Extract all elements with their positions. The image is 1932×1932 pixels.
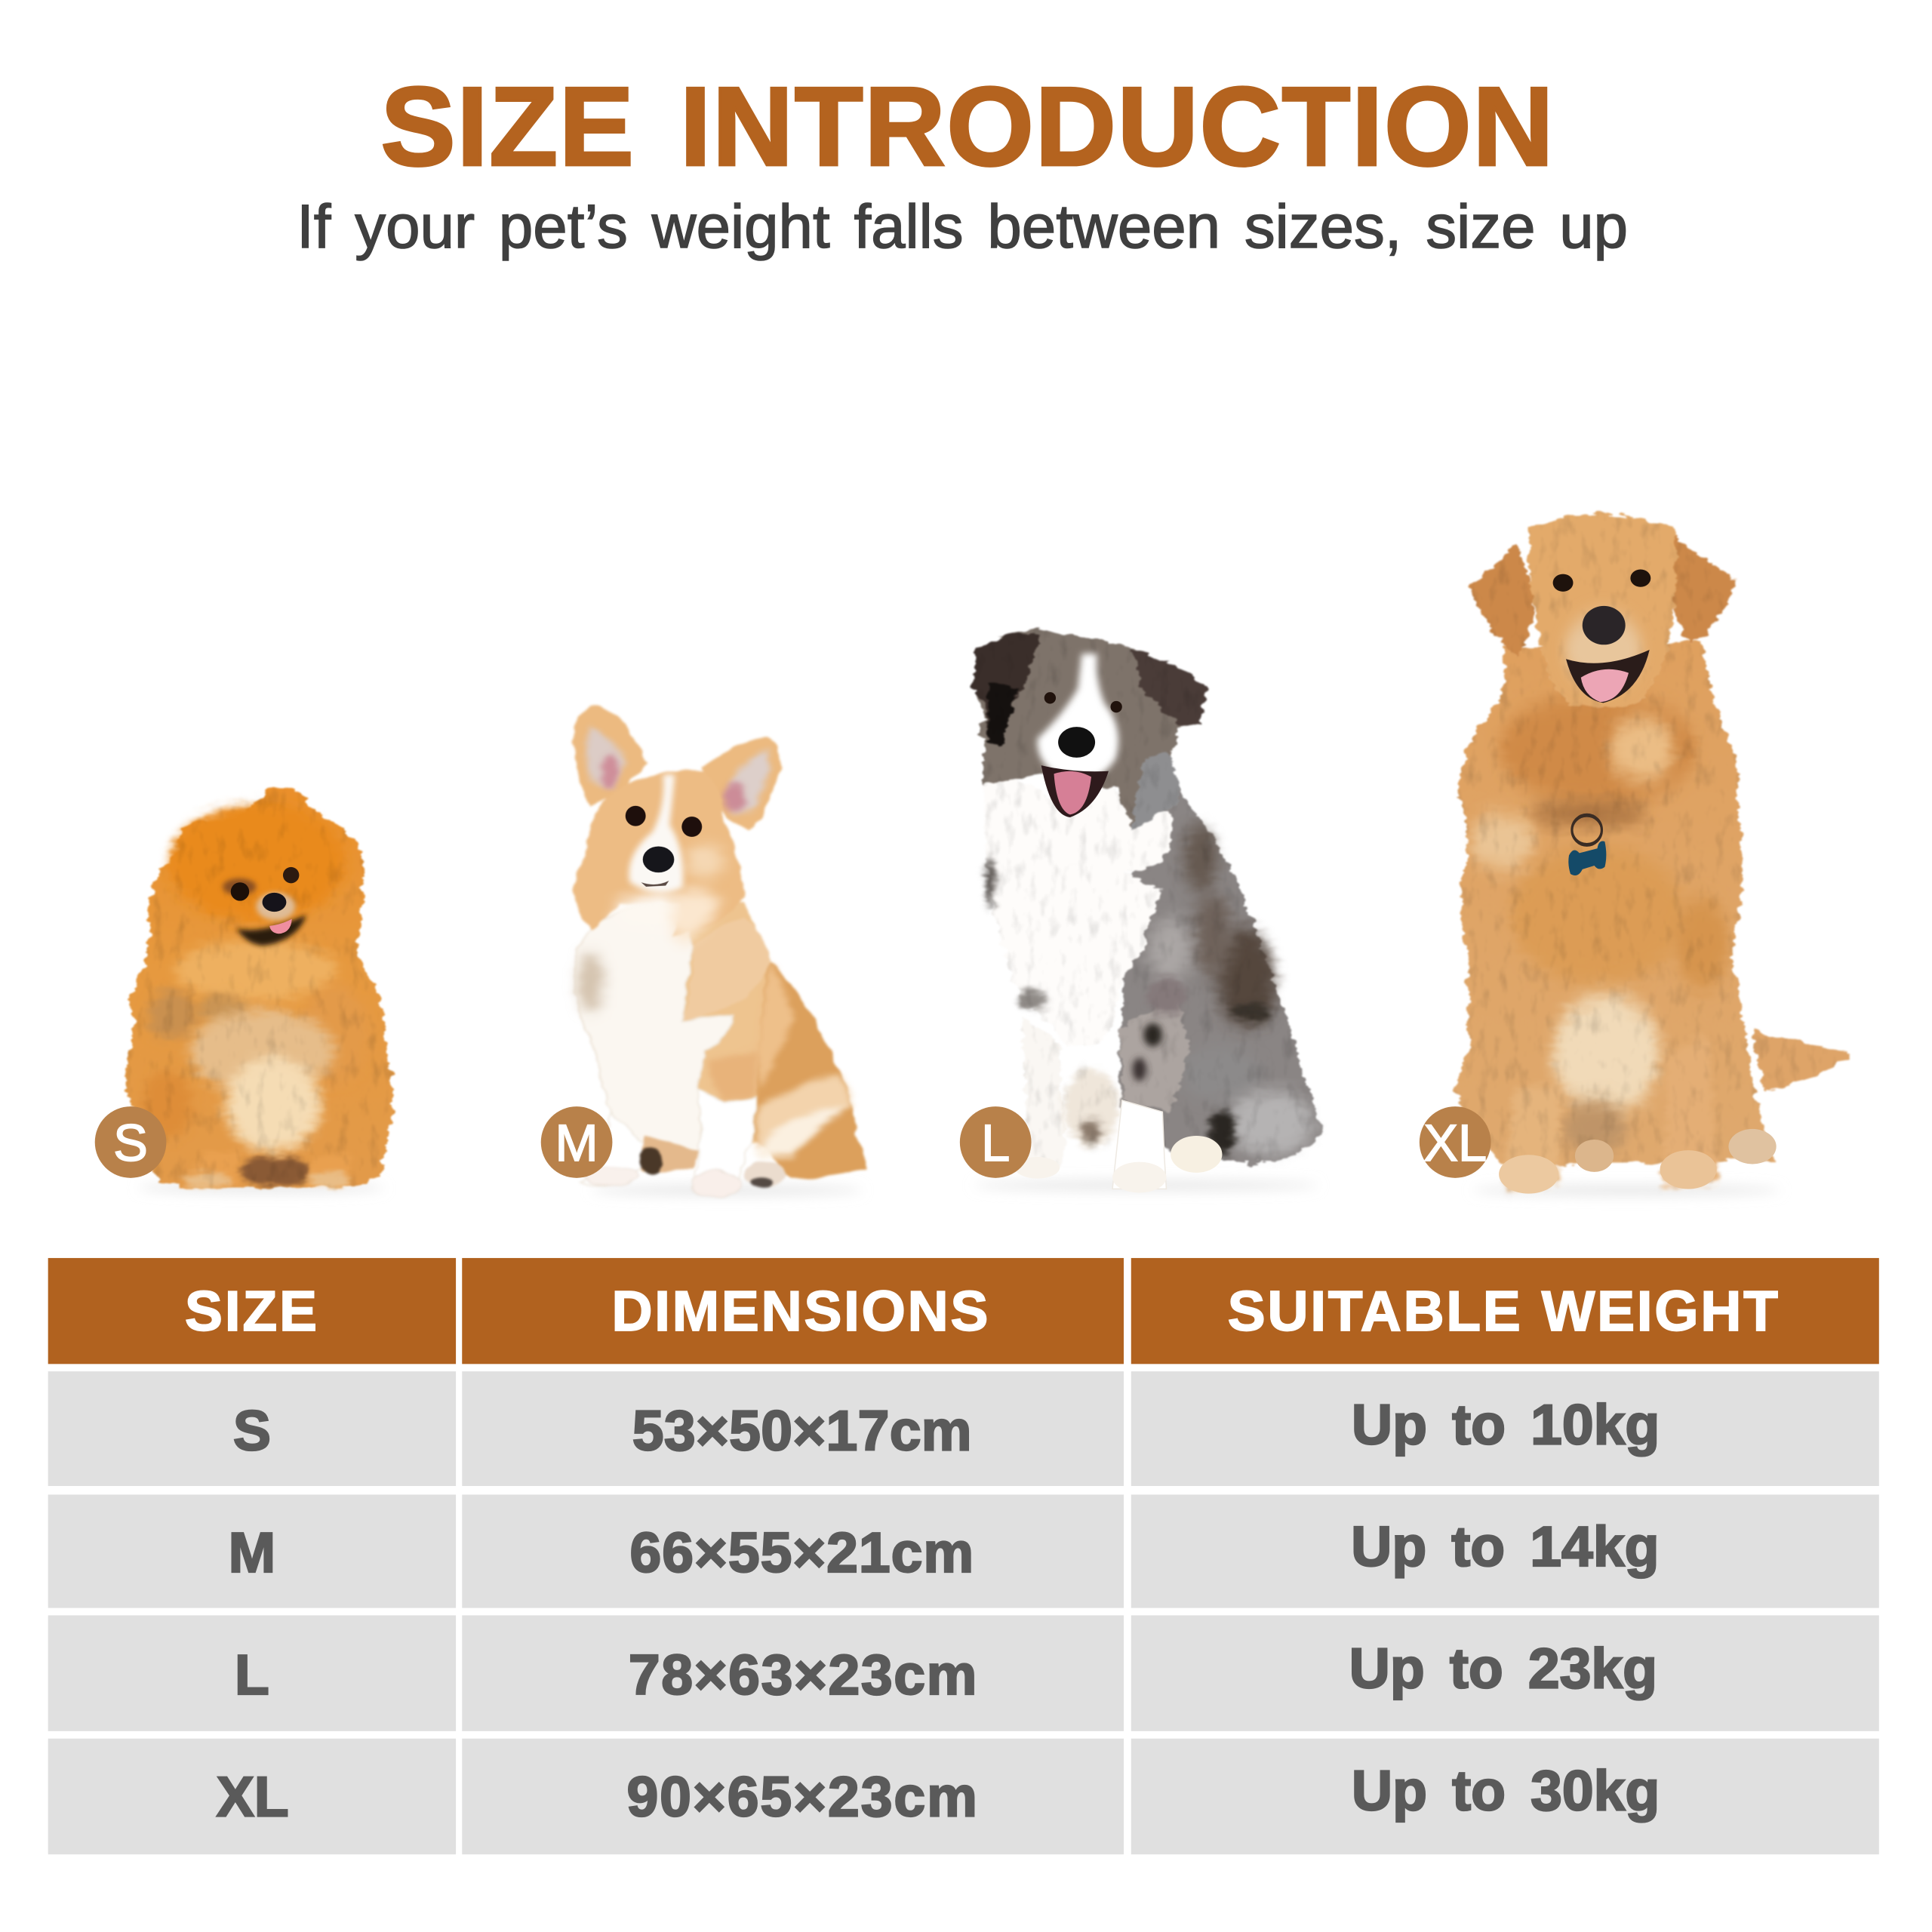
row XL: Up to 30kg	[1352, 1758, 1660, 1822]
dog M: corgi	[572, 706, 866, 1196]
icon: bone tag	[1568, 815, 1606, 875]
row S: 53×50×17cm	[632, 1399, 972, 1463]
row XL: 90×65×23cm	[626, 1765, 979, 1829]
dog L: australian shepherd	[972, 631, 1321, 1192]
badge XL: XL	[1423, 1114, 1487, 1172]
row M	[48, 1494, 1879, 1608]
row S: S	[233, 1399, 271, 1463]
table	[48, 1258, 1879, 1854]
row XL	[48, 1739, 1879, 1854]
dog XL: golden retriever	[1454, 514, 1850, 1195]
row M: 66×55×21cm	[630, 1521, 974, 1584]
header row: SIZE	[185, 1279, 319, 1343]
row L: L	[235, 1643, 269, 1706]
row XL: XL	[217, 1765, 289, 1829]
row L	[48, 1615, 1879, 1731]
row S	[48, 1371, 1879, 1486]
subtitle: If your pet’s weight falls between sizes, size up	[297, 192, 1628, 261]
row M: Up to 14kg	[1351, 1515, 1659, 1578]
badge L: L	[981, 1114, 1010, 1172]
row L: 78×63×23cm	[629, 1643, 978, 1706]
title: SIZE INTRODUCTION	[380, 65, 1555, 189]
row M: M	[229, 1521, 275, 1584]
badge S: S	[113, 1114, 148, 1172]
badge S	[95, 1106, 166, 1178]
badge L	[960, 1106, 1032, 1178]
row L: Up to 23kg	[1349, 1637, 1657, 1700]
header row	[48, 1258, 1879, 1364]
header row: DIMENSIONS	[611, 1279, 990, 1343]
badge M	[541, 1106, 612, 1178]
header row: SUITABLE WEIGHT	[1228, 1279, 1780, 1343]
row S: Up to 10kg	[1352, 1392, 1660, 1456]
dog S: pomeranian	[125, 786, 393, 1192]
badge M: M	[555, 1114, 598, 1172]
